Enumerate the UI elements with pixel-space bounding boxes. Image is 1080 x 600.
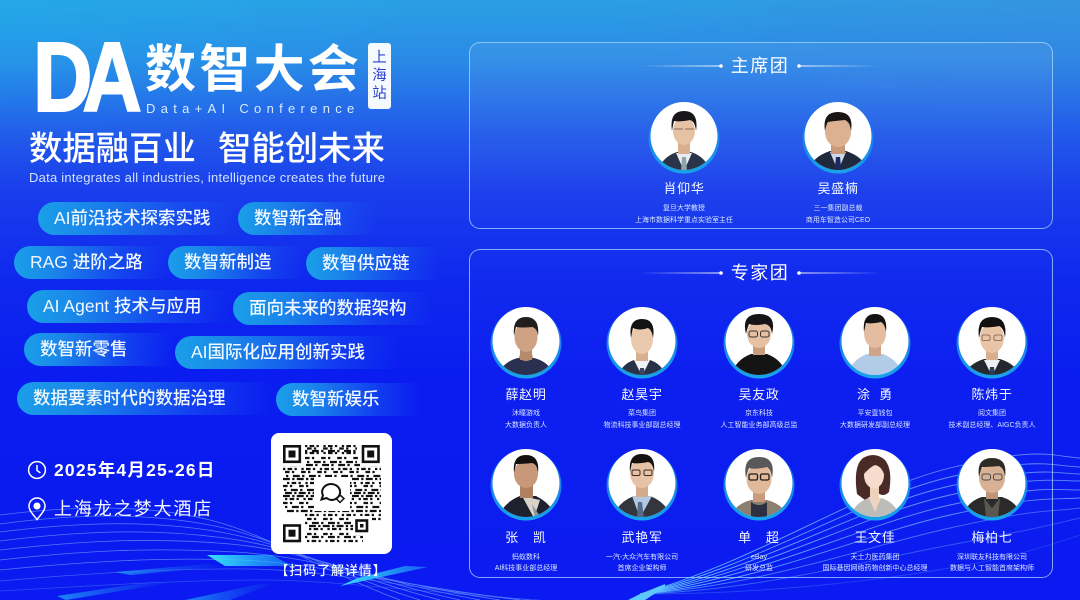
heading: chair group: 主席团 xyxy=(731,56,789,76)
tag: RAG xyxy=(14,246,168,279)
speaker: 陈炜于: 阅文集团 xyxy=(978,410,1006,417)
icon: clock xyxy=(28,460,46,480)
speaker: 吴盛楠: 三一集团副总裁 xyxy=(814,205,862,212)
tag: manufacturing: 数智新制造 xyxy=(184,252,272,272)
tag: data architecture: 面向未来的数据架构 xyxy=(249,298,406,318)
tag: retail xyxy=(24,333,174,366)
event venue: 上海龙之梦大酒店 xyxy=(54,499,213,519)
icon: wechat mark xyxy=(322,484,344,502)
tag: finance xyxy=(238,202,378,235)
speaker: 王文佳: 国际基因网络药物创新中心总经理 xyxy=(822,565,928,572)
portrait xyxy=(724,449,794,520)
speaker: 吴友政 xyxy=(720,307,798,428)
topic tags xyxy=(14,202,429,416)
speaker: 肖仰华: 上海市数据科学重点实验室主任 xyxy=(635,216,733,224)
tag: entertainment: 数智新娱乐 xyxy=(292,389,380,409)
speaker: 涂勇: 平安壹钱包 xyxy=(858,410,892,417)
tag: data governance xyxy=(17,382,275,415)
QR code xyxy=(271,433,392,554)
QR caption: 【扫码了解详情】 xyxy=(275,563,387,578)
icon: location pin xyxy=(28,497,46,521)
speaker: 武艳军 xyxy=(606,449,678,572)
portrait xyxy=(606,307,678,378)
speaker: 肖仰华: 肖仰华 xyxy=(663,181,705,196)
speaker: 赵昊宇: 菜鸟集团 xyxy=(628,410,656,417)
speaker: 涂勇: 大数据研发部副总经理 xyxy=(840,422,910,428)
speaker: 张凯: AI科技事业部总经理 xyxy=(495,565,557,572)
speaker: 梅柏七: 深圳联友科技有限公司 xyxy=(957,554,1027,560)
portrait xyxy=(648,102,720,174)
speaker: 肖仰华: 复旦大学教授 xyxy=(663,205,705,212)
tag: AI frontier xyxy=(38,202,238,235)
panel: expert group xyxy=(469,249,1053,578)
portrait xyxy=(490,307,562,378)
tag: data architecture xyxy=(233,292,433,325)
logo: conference title: 数智大会 xyxy=(145,41,362,98)
speaker: 武艳军: 武艳军 xyxy=(621,530,663,545)
tag: manufacturing xyxy=(168,246,303,279)
portrait xyxy=(802,102,874,174)
speaker: 单超: 单 超 xyxy=(738,530,780,545)
slogan: 数据融百业 智能创未来 xyxy=(29,131,385,168)
speaker: 涂勇 xyxy=(840,307,910,428)
speaker: 王文佳: 天士力医药集团 xyxy=(850,554,900,560)
event date: 2025年4月25-26日 xyxy=(54,460,216,480)
speaker: 吴盛楠: 商用车智造公司CEO xyxy=(806,216,870,224)
speaker: 陈炜于: 技术副总经理、AIGC负责人 xyxy=(948,422,1036,428)
speaker: 王文佳 xyxy=(822,449,928,572)
speaker: 吴友政: 吴友政 xyxy=(738,387,780,402)
tag: entertainment xyxy=(276,383,421,416)
portrait xyxy=(840,449,910,520)
portrait xyxy=(956,449,1028,520)
speaker: 武艳军: 一汽-大众汽车有限公司 xyxy=(606,554,678,560)
speaker: 张凯: 张 凯 xyxy=(505,530,547,545)
panel: chair group xyxy=(469,42,1053,229)
tag: data governance: 数据要素时代的数据治理 xyxy=(33,388,226,408)
speaker: 单超: 研发总监 xyxy=(745,565,773,572)
portrait xyxy=(606,449,678,520)
speaker: 吴盛楠: 吴盛楠 xyxy=(817,181,859,196)
tag: AI internationalization xyxy=(175,336,400,369)
logo: english conference name: Data+AI Conference xyxy=(146,101,360,116)
portrait xyxy=(490,449,562,520)
speaker: 薛赵明 xyxy=(490,307,562,428)
tag: AI Agent xyxy=(27,290,230,323)
heading: expert group: 专家团 xyxy=(731,263,789,283)
speaker: 赵昊宇: 赵昊宇 xyxy=(621,387,663,402)
portrait xyxy=(724,307,794,378)
heading: expert group xyxy=(643,263,877,283)
tag: supply chain xyxy=(306,247,441,280)
speaker: 赵昊宇 xyxy=(604,307,680,428)
speaker: 单超: eBay xyxy=(751,554,767,560)
tag: AI frontier: AI前沿技术探索实践 xyxy=(54,208,211,228)
tag: retail: 数智新零售 xyxy=(40,339,128,359)
speaker: 吴友政: 人工智能业务部高级总监 xyxy=(720,422,798,428)
tag: AI Agent: AI Agent 技术与应用 xyxy=(43,296,202,316)
tag: RAG: RAG 进阶之路 xyxy=(30,252,143,272)
portrait xyxy=(956,307,1028,378)
speaker: 陈炜于: 陈炜于 xyxy=(971,387,1013,402)
speaker: 梅柏七 xyxy=(950,449,1034,572)
tag: finance: 数智新金融 xyxy=(254,208,342,228)
speaker: 吴友政: 京东科技 xyxy=(745,410,773,417)
tag: supply chain: 数智供应链 xyxy=(322,253,410,273)
speaker: 涂勇: 涂 勇 xyxy=(857,387,893,402)
logo: DA letters: DA xyxy=(33,22,132,132)
tag: AI internationalization: AI国际化应用创新实践 xyxy=(191,342,365,362)
speaker: 陈炜于 xyxy=(948,307,1036,428)
speaker: 赵昊宇: 物流科技事业部副总经理 xyxy=(604,422,680,428)
speaker: 单超 xyxy=(724,449,794,572)
speaker: 吴盛楠 xyxy=(802,102,874,224)
speaker: 薛赵明: 大数据负责人 xyxy=(505,422,547,428)
badge: Shanghai station: 站 xyxy=(372,86,387,102)
badge: Shanghai station xyxy=(368,43,391,109)
badge: Shanghai station: 上 xyxy=(372,50,387,66)
speaker: 薛赵明: 沐瞳游戏 xyxy=(512,410,540,417)
speaker: 梅柏七: 数据与人工智能首席架构师 xyxy=(950,565,1034,572)
slogan english: Data integrates all industries, intelligence creates the future xyxy=(29,170,385,185)
speaker: 张凯: 蚂蚁数科 xyxy=(512,554,540,560)
speaker: 薛赵明: 薛赵明 xyxy=(505,387,547,402)
speaker: 肖仰华 xyxy=(635,102,733,224)
speaker: 王文佳: 王文佳 xyxy=(854,530,896,545)
portrait xyxy=(840,307,910,378)
speaker: 梅柏七: 梅柏七 xyxy=(971,530,1013,545)
badge: Shanghai station: 海 xyxy=(372,68,387,84)
heading: chair group xyxy=(644,56,876,76)
speaker: 张凯 xyxy=(490,449,562,572)
speaker: 武艳军: 首席企业架构师 xyxy=(618,565,666,572)
